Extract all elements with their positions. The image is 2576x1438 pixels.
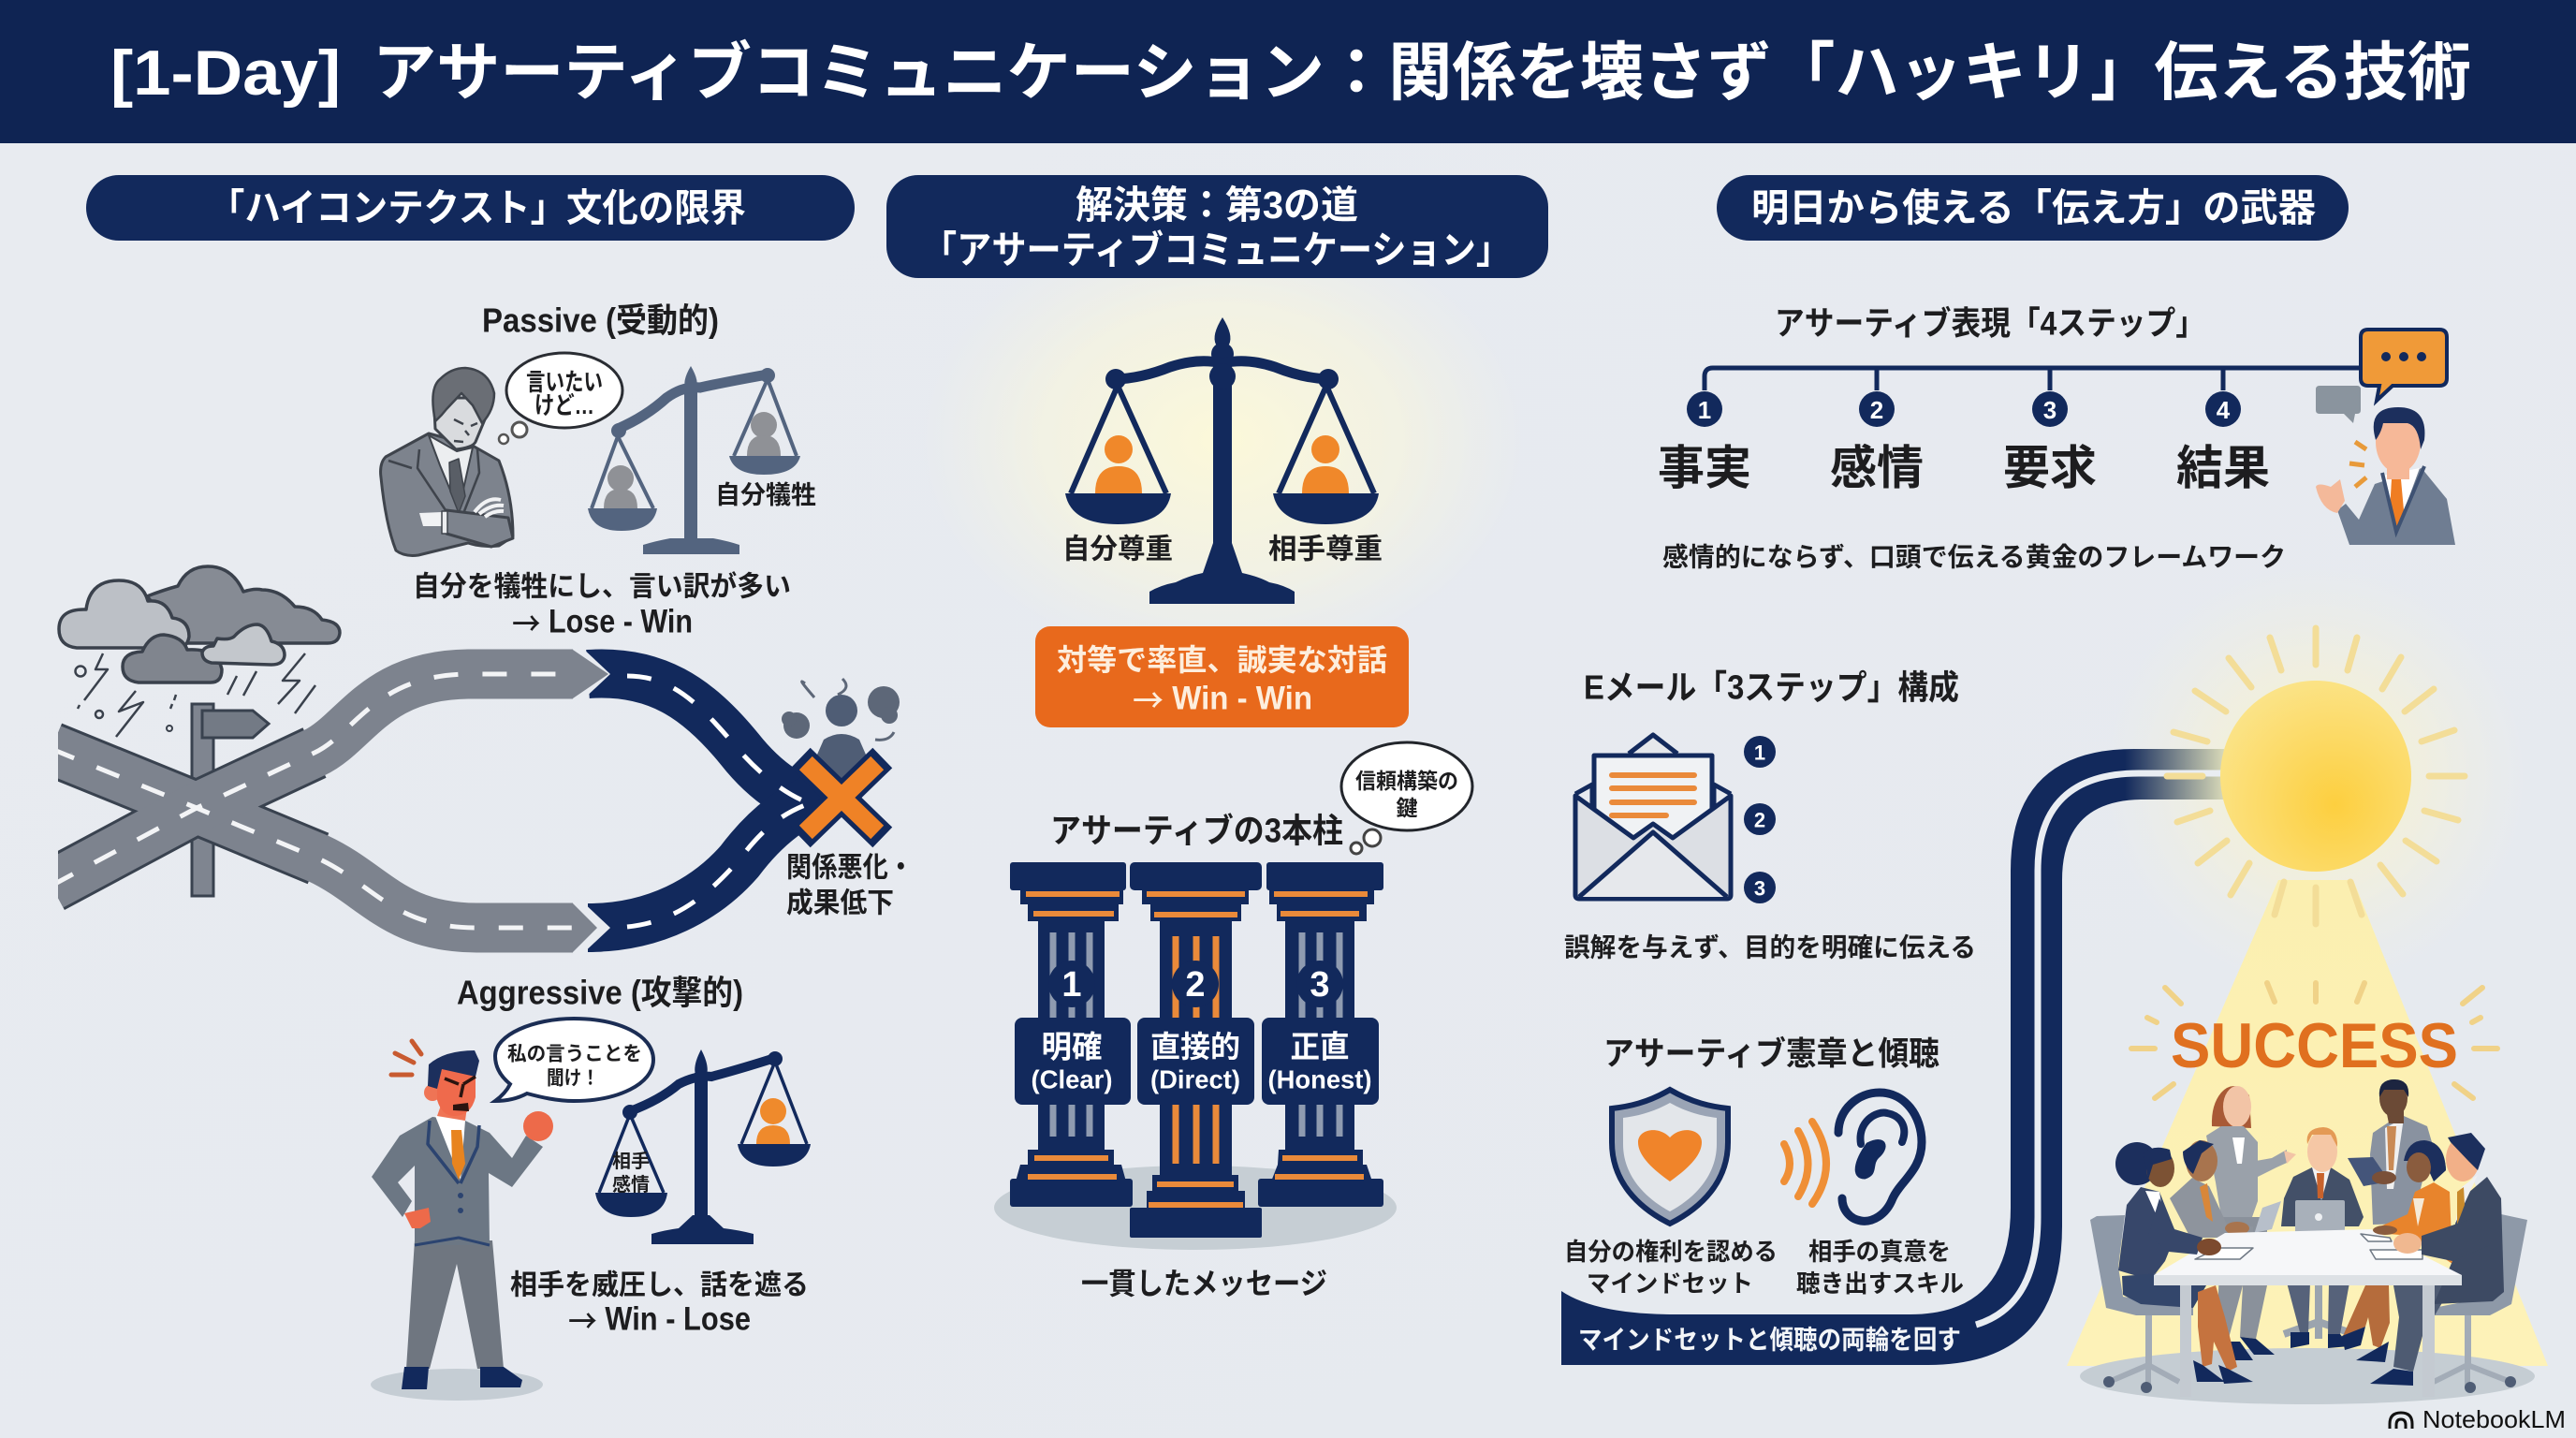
pillar 2: direct	[1130, 862, 1262, 1238]
4 steps heading: アサーティブ表現「4ステップ」	[1775, 305, 2205, 343]
notebooklm logo: NotebookLM	[2422, 1405, 2566, 1433]
labels: mindset and listening: 相手の真意を	[1808, 1238, 1951, 1266]
standing man right	[2348, 1079, 2432, 1225]
labels: mindset and listening	[1564, 1238, 1964, 1298]
grey roads crossing	[51, 650, 608, 952]
icon: signpost	[192, 704, 269, 896]
pillar 3: honest	[1258, 862, 1383, 1207]
light beam and glow from sun	[2067, 565, 2548, 1366]
4 step timeline: 1	[1698, 396, 1711, 424]
email step numbers: 3	[1754, 876, 1765, 901]
icon: balanced scale	[1065, 317, 1379, 604]
icon: shield heart	[1612, 1090, 1728, 1224]
aggressive description: 相手を威圧し、話を遮る	[510, 1269, 809, 1301]
aggressive description	[510, 1269, 809, 1343]
pillar 2: direct: (Direct)	[1150, 1065, 1240, 1093]
labels: mutual respect: 自分尊重	[1062, 534, 1173, 565]
table	[2154, 1229, 2462, 1397]
label: consistent message: 一貫したメッセージ	[1081, 1267, 1327, 1300]
heading: solution third way: 解決策：第3の道	[1076, 183, 1358, 227]
icon: ear	[1838, 1093, 1922, 1221]
title banner: [1-Day]	[110, 37, 341, 109]
passive description	[413, 571, 791, 646]
email step numbers	[1744, 736, 1776, 903]
passive description: → Lose - Win	[512, 597, 693, 646]
icon: passive man	[381, 368, 513, 555]
pillar 2: direct: 直接的	[1150, 1030, 1240, 1064]
heading: high context limits: 「ハイコンテクスト」文化の限界	[209, 186, 746, 229]
callout: win-win	[1035, 626, 1409, 727]
pillar 1: clear: (Clear)	[1032, 1065, 1112, 1093]
pillar 3: honest: (Honest)	[1267, 1065, 1372, 1093]
road to success: マインドセットと傾聴の両輪を回す	[1578, 1326, 1961, 1354]
email heading: Eメール「3ステップ」構成	[1584, 668, 1959, 706]
illustration: team meeting	[2080, 1079, 2535, 1404]
icon: envelope	[1575, 735, 1731, 899]
icon: scale tilted passive	[588, 366, 800, 554]
standing woman	[2206, 1086, 2296, 1360]
center chair post	[2284, 1283, 2354, 1339]
success text with sparkle rays	[2131, 983, 2497, 1098]
navy roads to bad outcome	[580, 646, 828, 956]
label: others' feelings on pan	[612, 1151, 650, 1196]
right seated man	[2370, 1133, 2504, 1386]
thought bubble: passive: 言いたい	[526, 368, 603, 396]
pillar 2: direct: 2	[1185, 965, 1206, 1005]
email description: 誤解を与えず、目的を明確に伝える	[1564, 932, 1976, 962]
4 step timeline: 2	[1870, 396, 1883, 424]
label: outcome: 成果低下	[786, 888, 894, 919]
heading: tools for tomorrow	[1717, 175, 2349, 241]
pillar 1: clear	[1010, 862, 1133, 1207]
label: outcome: 関係悪化・	[786, 852, 914, 884]
4 step timeline: 結果	[2176, 442, 2270, 494]
left seated man	[2170, 1140, 2281, 1239]
labels: mutual respect: 相手尊重	[1268, 534, 1383, 565]
labels: mutual respect	[1062, 534, 1383, 565]
chairs	[2090, 1214, 2527, 1393]
icon: frustrated person with X	[782, 679, 900, 828]
labels: mindset and listening: 自分の権利を認める	[1564, 1238, 1778, 1266]
aggressive description: → Win - Lose	[568, 1296, 751, 1343]
thought bubble: trust: 鍵	[1397, 796, 1417, 820]
charter heading: アサーティブ憲章と傾聴	[1603, 1035, 1939, 1073]
labels: mindset and listening: マインドセット	[1587, 1269, 1753, 1298]
pillars heading: アサーティブの3本柱	[1050, 811, 1343, 850]
pillar 3: honest: 正直	[1290, 1030, 1350, 1064]
icon: scale tilted aggressive	[595, 1049, 811, 1244]
callout: win-win: 対等で率直、誠実な対話	[1057, 643, 1387, 677]
title banner	[0, 0, 2576, 143]
thought bubble: trust	[1341, 742, 1472, 854]
thought bubble: trust: 信頼構築の	[1355, 769, 1458, 793]
floor under pillars	[994, 1166, 1397, 1250]
4 step timeline: 感情	[1830, 442, 1924, 494]
icon: speaking man	[2316, 330, 2455, 545]
pillar 3: honest: 3	[1310, 965, 1330, 1005]
icon: sound waves	[1784, 1122, 1826, 1204]
heading: tools for tomorrow: 明日から使える「伝え方」の武器	[1751, 186, 2316, 229]
email step numbers: 2	[1754, 809, 1765, 831]
pillar 1: clear: 明確	[1041, 1030, 1103, 1064]
right seated woman	[2342, 1140, 2452, 1362]
label: outcome	[786, 852, 914, 919]
passive heading: Passive (受動的)	[482, 301, 719, 339]
left seated woman	[2115, 1142, 2253, 1384]
email step numbers: 1	[1754, 741, 1765, 764]
4 step timeline: 4	[2217, 396, 2231, 424]
4 step timeline: 3	[2043, 396, 2056, 424]
heading: high context limits	[86, 175, 855, 241]
heading: solution third way: 「アサーティブコミュニケーション」	[922, 228, 1511, 271]
icon: aggressive man	[371, 1041, 553, 1401]
success text with sparkle rays: SUCCESS	[2171, 1010, 2458, 1081]
aggressive heading: Aggressive (攻撃的)	[457, 974, 743, 1011]
icon: storm clouds	[59, 566, 340, 737]
pillar 1: clear: 1	[1061, 965, 1082, 1005]
speech bubble: aggressive	[495, 1019, 653, 1101]
passive description: 自分を犠牲にし、言い訳が多い	[413, 571, 791, 603]
center man	[2281, 1127, 2364, 1348]
heading: solution third way	[886, 175, 1548, 278]
speech bubble: aggressive: 私の言うことを	[507, 1043, 642, 1065]
4 step timeline: 事実	[1658, 442, 1751, 494]
glow behind central scale	[922, 215, 1521, 665]
label: others' feelings on pan: 感情	[612, 1173, 650, 1196]
4 step timeline: 要求	[2003, 442, 2097, 494]
4 step description: 感情的にならず、口頭で伝える黄金のフレームワーク	[1662, 543, 2286, 571]
speech bubble: aggressive: 聞け！	[547, 1067, 599, 1090]
label: self sacrifice: 自分犠牲	[715, 481, 816, 509]
sleeves and hands on table	[2148, 1198, 2490, 1261]
4 step timeline	[1658, 368, 2365, 494]
road to success	[1561, 749, 2224, 1365]
labels: mindset and listening: 聴き出すスキル	[1796, 1269, 1964, 1298]
label: others' feelings on pan: 相手	[612, 1151, 650, 1172]
title banner: アサーティブコミュニケーション：関係を壊さず「ハッキリ」伝える技術	[373, 37, 2471, 109]
callout: win-win: → Win - Win	[1133, 674, 1312, 723]
thought bubble: passive	[499, 353, 622, 444]
thought bubble: passive: けど…	[534, 391, 594, 419]
icon: sun	[2167, 628, 2465, 924]
